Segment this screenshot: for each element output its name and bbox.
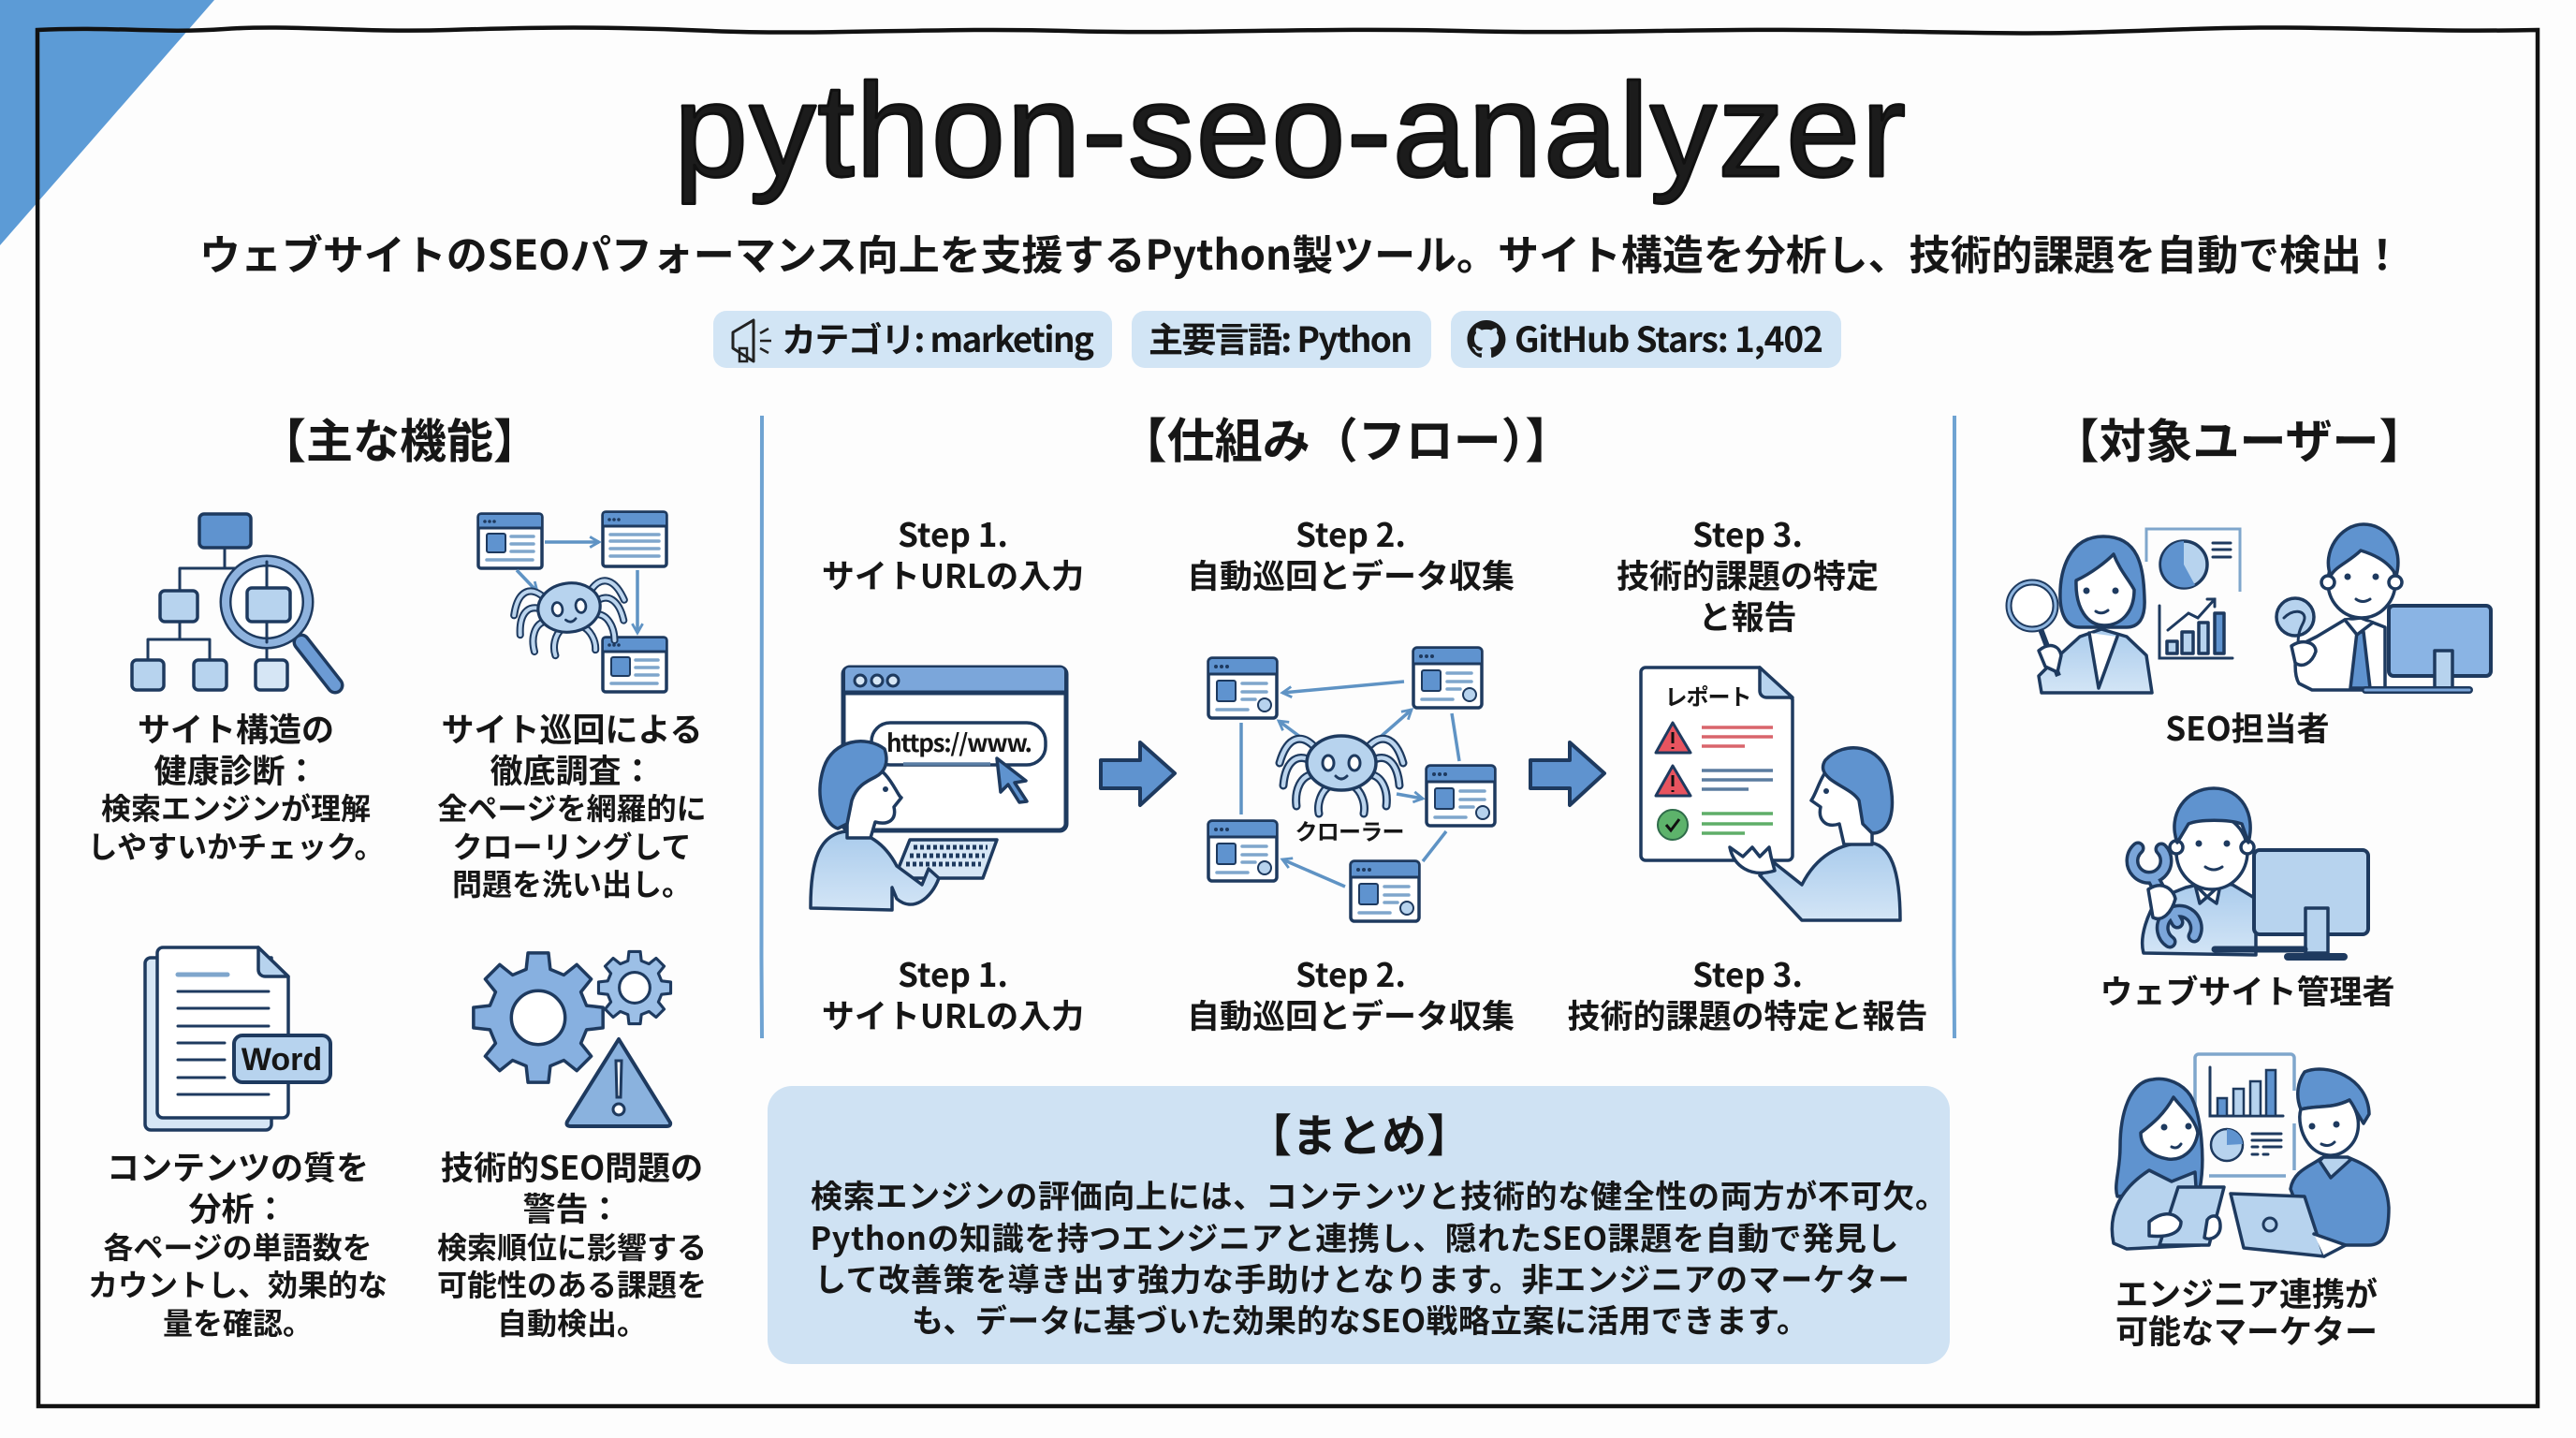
text: site structure: しやすいかチェック。: [87, 824, 385, 867]
heading: target users: 【対象ユーザー】: [2052, 404, 2426, 472]
step 2 label top: Step 2.: [1295, 509, 1406, 557]
text: technical seo: 技術的SEO問題の: [441, 1142, 703, 1190]
subtitle: ウェブサイトのSEOパフォーマンス向上を支援するPython製ツール。サイト構造を分析し、技術的課題を自動で検出！: [199, 222, 2403, 282]
icon: megaphone: [733, 320, 771, 361]
text: content quality: [88, 1142, 388, 1343]
text: technical seo: 検索順位に影響する: [437, 1225, 707, 1268]
title: python-seo-analyzer: [674, 56, 1906, 205]
summary text: Pythonの知識を持つエンジニアと連携し、隠れたSEO課題を自動で発見し: [811, 1213, 1898, 1259]
icon: crawler pages: [478, 512, 666, 692]
text: crawl: 問題を洗い出し。: [452, 861, 692, 904]
icon: site tree with magnifier: [132, 514, 335, 690]
text: technical seo: 自動検出。: [497, 1300, 647, 1343]
step 1 label top: サイトURLの入力: [822, 550, 1084, 598]
step 1 label bottom: Step 1.: [898, 949, 1008, 997]
label: collaborating marketer: 可能なマーケター: [2115, 1306, 2378, 1354]
tag: category: カテゴリ: marketing: [782, 312, 1094, 362]
label: collaborating marketer: エンジニア連携が: [2115, 1269, 2378, 1316]
step 3 label top: 技術的課題の特定: [1617, 550, 1879, 598]
step 3 label bottom: Step 3.: [1692, 949, 1803, 997]
step 1 label bottom: [822, 949, 1084, 1038]
illustration: crawler network: クローラー: [1295, 814, 1404, 846]
panel: summary: [768, 1086, 1950, 1364]
label: seo manager: SEO担当者: [2165, 703, 2330, 751]
text: crawl: [437, 704, 707, 904]
arrow: step 2 to 3: [1530, 742, 1604, 805]
text: site structure: [87, 704, 385, 867]
text: site structure: サイト構造の: [138, 704, 334, 752]
illustration: seo man with monitor: [2276, 524, 2491, 690]
illustration: user entering url: [811, 668, 1066, 910]
text: content quality: 分析：: [188, 1183, 287, 1231]
step 2 label bottom: 自動巡回とデータ収集: [1187, 990, 1515, 1038]
text: crawl: 全ページを網羅的に: [437, 785, 707, 829]
divider left: [761, 416, 763, 1038]
text: content quality: 量を確認。: [163, 1300, 313, 1343]
summary heading: 【まとめ】: [1247, 1099, 1471, 1165]
illustration: report review: レポート: [1664, 679, 1752, 712]
summary text: 検索エンジンの評価向上には、コンテンツと技術的な健全性の両方が不可欠。: [811, 1171, 1947, 1217]
icon: github: [1468, 320, 1505, 358]
step 3 label top: [1617, 509, 1879, 639]
heading: features: 【主な機能】: [259, 404, 540, 472]
icon: document with word badge: Word: [242, 1042, 322, 1078]
tag: language: 主要言語: Python: [1149, 312, 1412, 362]
text: technical seo: 警告：: [522, 1183, 622, 1231]
step 3 label top: と報告: [1698, 592, 1797, 639]
arrow: step 1 to 2: [1101, 742, 1175, 805]
label: collaborating marketer: [2115, 1269, 2378, 1354]
panel: features: [87, 512, 707, 1343]
summary text: も、データに基づいた効果的なSEO戦略立案に活用できます。: [912, 1296, 1808, 1342]
step 3 label bottom: 技術的課題の特定と報告: [1567, 990, 1928, 1038]
tag: stars: GitHub Stars: 1,402: [1515, 312, 1823, 362]
text: content quality: 各ページの単語数を: [103, 1225, 373, 1268]
step 1 label bottom: サイトURLの入力: [822, 990, 1084, 1038]
text: site structure: 健康診断：: [154, 745, 318, 793]
label: webmaster: ウェブサイト管理者: [2100, 966, 2395, 1014]
illustration: webmaster: [2132, 788, 2368, 957]
summary text: して改善策を導き出す強力な手助けとなります。非エンジニアのマーケター: [814, 1255, 1910, 1300]
panel: flow: [811, 509, 1928, 1038]
step 3 label top: Step 3.: [1692, 509, 1803, 557]
icon: document with word badge: [145, 947, 330, 1130]
illustration: user entering url: https://www.: [886, 725, 1032, 759]
illustration: report review: [1641, 668, 1900, 920]
illustration: seo woman with charts: [2009, 529, 2240, 693]
text: technical seo: 可能性のある課題を: [437, 1262, 707, 1305]
illustration: crawler network: [1208, 648, 1495, 921]
step 2 label top: [1187, 509, 1515, 598]
step 2 label top: 自動巡回とデータ収集: [1187, 550, 1515, 598]
divider right: [1954, 416, 1955, 1038]
step 2 label bottom: Step 2.: [1295, 949, 1406, 997]
text: technical seo: [437, 1142, 707, 1343]
summary text: [811, 1171, 1947, 1342]
text: crawl: 徹底調査：: [490, 745, 654, 793]
heading: flow: 【仕組み（フロー）】: [1120, 403, 1573, 472]
text: crawl: クローリングして: [452, 824, 692, 867]
step 1 label top: Step 1.: [898, 509, 1008, 557]
panel: target users: [2009, 524, 2491, 1354]
text: content quality: カウントし、効果的な: [88, 1262, 388, 1305]
step 1 label top: [822, 509, 1084, 598]
step 2 label bottom: [1187, 949, 1515, 1038]
text: content quality: コンテンツの質を: [107, 1142, 369, 1190]
illustration: marketer and engineer: [2112, 1054, 2389, 1256]
tag: category: [713, 311, 1112, 368]
text: crawl: サイト巡回による: [442, 704, 702, 752]
text: site structure: 検索エンジンが理解: [101, 785, 371, 829]
corner triangle: [0, 0, 214, 245]
icon: gears and warning: [474, 951, 671, 1126]
step 3 label bottom: [1567, 949, 1928, 1038]
